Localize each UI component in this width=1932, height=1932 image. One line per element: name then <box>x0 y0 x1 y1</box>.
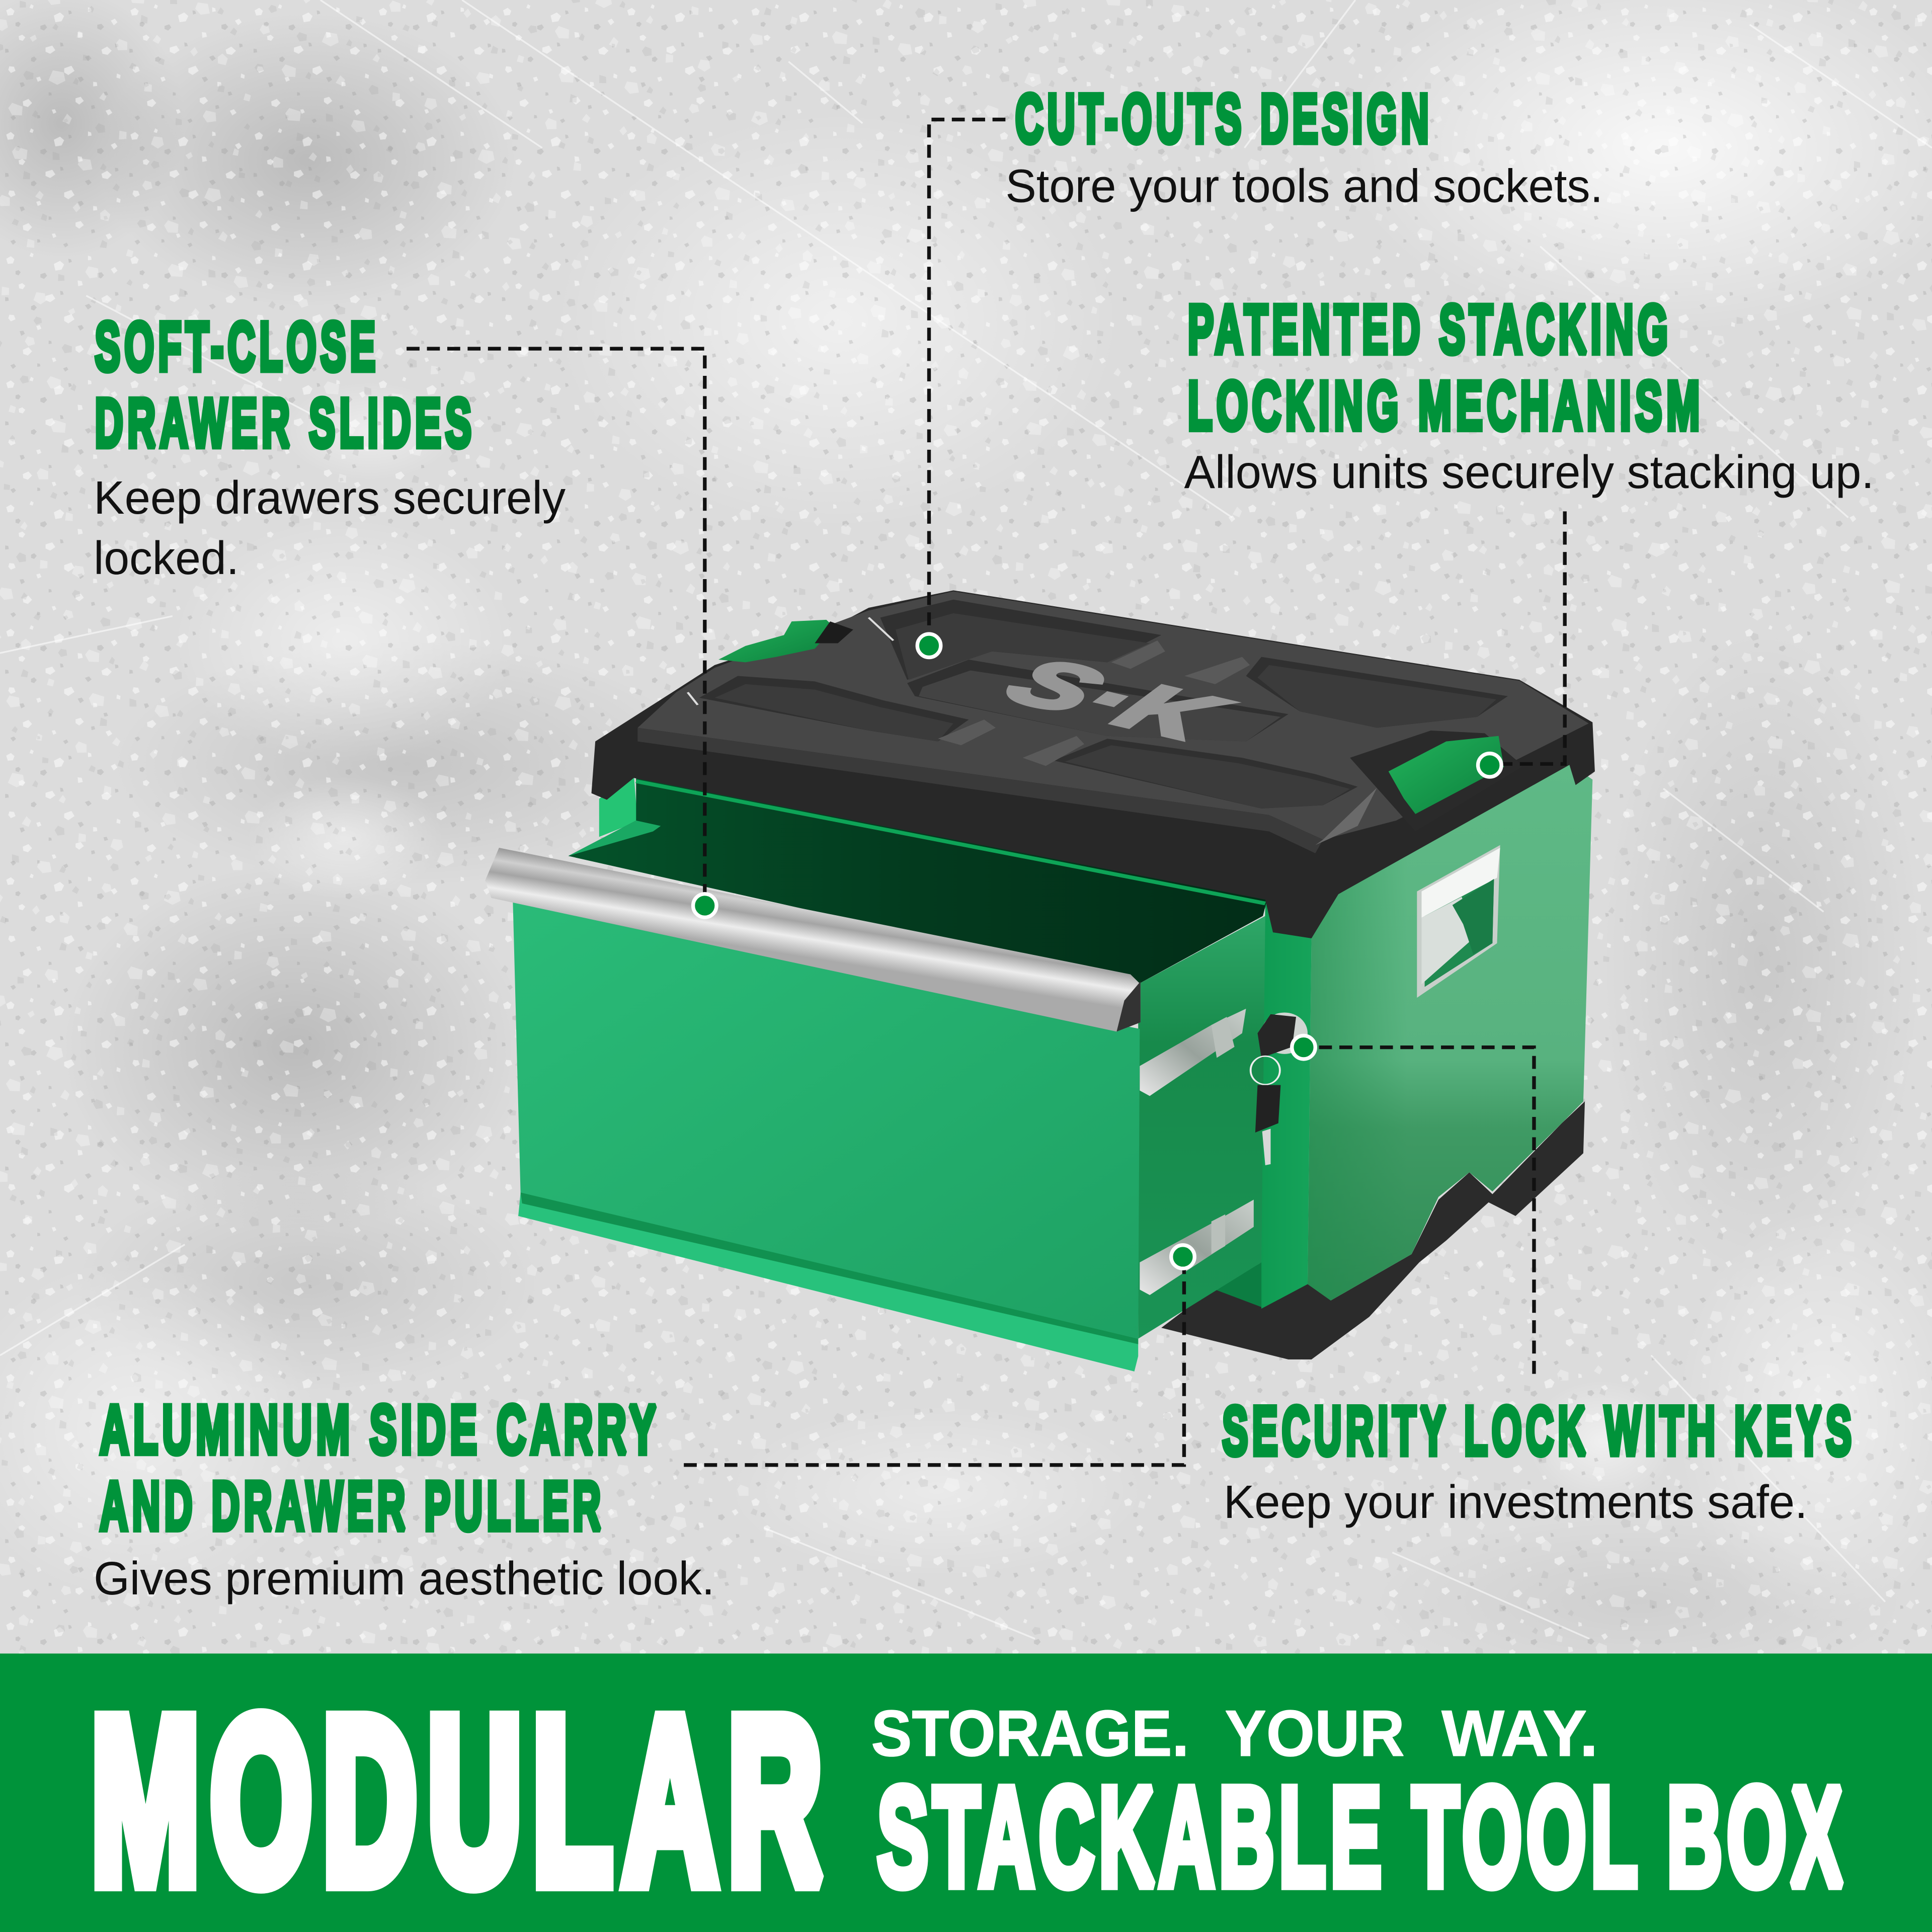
text block: soft-close drawer slides: locked. <box>94 532 239 584</box>
banner tagline: YOUR <box>1225 1697 1405 1770</box>
text block: cut-outs design: CUT-OUTS DESIGN <box>1015 80 1433 157</box>
open drawer interior <box>569 771 1269 984</box>
lower drawer slide <box>1140 1199 1254 1295</box>
lower drawer recess <box>1215 1262 1261 1307</box>
bottom banner <box>0 1654 1932 1932</box>
drawer front panel <box>513 902 1140 1339</box>
S&K lid logo: S·K <box>989 645 1243 756</box>
drawer bottom lip <box>518 1192 1138 1372</box>
box left side strip <box>599 774 637 837</box>
base: black bumper <box>1161 1101 1585 1359</box>
text block: soft-close drawer slides: DRAWER SLIDES <box>95 385 475 462</box>
text block: aluminum side carry and drawer puller: ALUMINUM SIDE CARRY <box>100 1392 661 1469</box>
text block: cut-outs design: Store your tools and sockets. <box>1005 160 1603 212</box>
tool box product illustration <box>485 590 1595 1372</box>
lid <box>592 590 1595 938</box>
text block: patented stacking locking mechanism: Allows units securely stacking up. <box>1184 446 1874 498</box>
box front strip <box>1260 902 1312 1309</box>
callout: cut-outs leader line <box>917 120 1005 658</box>
text block: soft-close drawer slides <box>94 308 566 584</box>
box right side panel <box>1308 763 1592 1301</box>
drawer side wall <box>1138 916 1265 1339</box>
text block: patented stacking locking mechanism <box>1184 291 1874 498</box>
text block: aluminum side carry and drawer puller <box>94 1392 714 1604</box>
upper drawer slide <box>1140 1009 1246 1096</box>
left latch <box>718 620 853 662</box>
banner tagline: WAY. <box>1441 1697 1598 1770</box>
text block: aluminum side carry and drawer puller: Gives premium aesthetic look. <box>94 1552 714 1604</box>
text block: soft-close drawer slides: Keep drawers securely <box>94 471 566 524</box>
text block: aluminum side carry and drawer puller: AND DRAWER PULLER <box>100 1468 605 1545</box>
aluminum drawer handle <box>485 848 1141 1031</box>
right latch <box>1350 731 1523 832</box>
banner title: modular: MODULAR <box>91 1670 833 1931</box>
text block: security lock with keys <box>1222 1393 1856 1528</box>
text block: soft-close drawer slides: SOFT-CLOSE <box>95 308 379 385</box>
callout: security lock leader line <box>1292 1035 1534 1374</box>
banner tagline: STORAGE. <box>871 1697 1189 1770</box>
callout: stacking leader line <box>1478 511 1565 777</box>
lock with keys <box>1251 1012 1308 1165</box>
callout: soft-close leader line <box>407 349 716 917</box>
text block: cut-outs design <box>1005 80 1603 212</box>
callout: aluminum leader line <box>684 1245 1194 1465</box>
text block: security lock with keys: Keep your investments safe. <box>1224 1476 1808 1528</box>
side carry handle <box>1417 845 1500 998</box>
banner tagline <box>871 1697 1598 1770</box>
